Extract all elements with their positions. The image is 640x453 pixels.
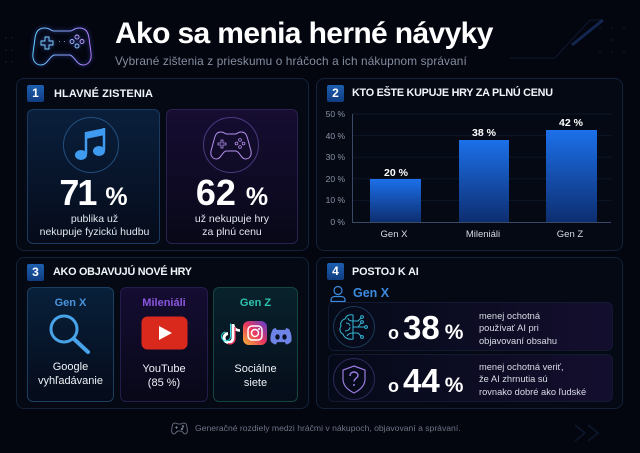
card: Gen Z: [213, 287, 298, 402]
description: menej ochotná veriť,: [479, 362, 564, 372]
bar chart: 20 %: [326, 174, 345, 184]
panel: postoj k AI: [316, 257, 623, 409]
section number 3: 3: [32, 265, 39, 279]
icon: shield question: [333, 358, 375, 400]
icon: Discord: [270, 328, 292, 344]
label Google: Google: [53, 361, 88, 373]
label YouTube: YouTube: [142, 363, 186, 375]
bar chart: 0 %: [330, 217, 345, 227]
bar chart: 38 %: [472, 127, 497, 139]
icon: music note: [63, 117, 119, 173]
caption: [40, 213, 149, 238]
label Gen X: Gen X: [353, 286, 389, 300]
bar chart: Gen Z: [557, 229, 583, 240]
panel: kto ešte kupuje: [316, 78, 623, 251]
label Gen Z: Gen Z: [240, 297, 271, 309]
bar chart: 20 %: [384, 167, 409, 179]
caption: za plnú cenu: [202, 226, 262, 238]
label Mileniáli: Mileniáli: [142, 297, 186, 309]
description: že AI zhrnutia sú: [479, 374, 548, 384]
icon: controller: [203, 117, 259, 173]
bar chart: 50 %: [326, 109, 345, 119]
stat o 38 %: o38%: [388, 309, 463, 346]
icon: footer controller: [171, 422, 188, 434]
description: [479, 362, 586, 397]
icon: AI brain: [333, 306, 375, 348]
icon: person: [330, 286, 346, 302]
description: rovnako dobré ako ľudské: [479, 387, 586, 397]
card: plná cena: [166, 109, 298, 244]
icon: TikTok: [221, 324, 240, 345]
label Google: [38, 361, 103, 387]
section number 1: 1: [32, 86, 39, 100]
section number 4: 4: [332, 264, 339, 278]
caption: už nekupuje hry: [195, 213, 269, 225]
label Google: vyhľadávanie: [38, 375, 103, 387]
icon: magnifier: [50, 314, 90, 354]
description: [479, 311, 557, 346]
bar chart: 30 %: [326, 152, 345, 162]
caption: [195, 213, 269, 238]
heading: kto ešte kupuje: KTO EŠTE KUPUJE HRY ZA PLNÚ CENU: [352, 87, 553, 99]
description: objavovaní obsahu: [479, 336, 557, 346]
icon: YouTube: [142, 316, 188, 350]
section number 4: [327, 263, 344, 280]
section number 3: [27, 264, 44, 281]
heading: ako objavujú: AKO OBJAVUJÚ NOVÉ HRY: [53, 266, 192, 278]
label Gen X: Gen X: [55, 297, 86, 309]
icon: Instagram: [243, 321, 267, 345]
section number 2: 2: [332, 86, 339, 100]
bar chart: Gen X: [381, 229, 408, 240]
heading: hlavné zistenia: HLAVNÉ ZISTENIA: [54, 88, 153, 100]
label YouTube: [142, 363, 186, 389]
card: fyzická hudba: [27, 109, 160, 244]
footer text: Generačné rozdiely medzi hráčmi v nákupoch, objavovaní a správaní.: [195, 423, 461, 433]
description: používať AI pri: [479, 323, 539, 333]
icon: neon game controller: [30, 24, 94, 68]
stat o 44 %: o44%: [388, 362, 463, 399]
panel: ako objavujú: [16, 257, 309, 409]
subtitle: Vybrané zištenia z prieskumu o hráčoch a ich nákupnom správaní: [115, 54, 467, 68]
caption: nekupuje fyzickú hudbu: [40, 226, 149, 238]
bar chart: 10 %: [326, 195, 345, 205]
section number 1: [27, 85, 44, 102]
footer: [171, 422, 461, 434]
label Sociálne siete: Sociálne: [234, 363, 277, 375]
label Sociálne siete: siete: [244, 377, 267, 389]
card: Gen X: [27, 287, 114, 402]
bar chart: [326, 109, 611, 240]
title: Ako sa menia herné návyky: [115, 17, 493, 50]
row: 38 %: [328, 302, 613, 351]
stat 62 %: 62 %: [196, 172, 268, 213]
panel: hlavné zistenia: [16, 78, 309, 251]
label Sociálne siete: [234, 363, 277, 389]
label YouTube: (85 %): [148, 377, 180, 389]
bar chart: Mileniáli: [466, 229, 500, 240]
card: Mileniáli: [120, 287, 208, 402]
bar chart: 42 %: [559, 117, 584, 129]
bar chart: 40 %: [326, 131, 345, 141]
row: 44 %: [328, 354, 613, 402]
stat 71 %: 71 %: [59, 172, 128, 213]
caption: publika už: [71, 213, 118, 225]
section number 2: [327, 85, 344, 102]
description: menej ochotná: [479, 311, 540, 321]
heading: postoj k AI: POSTOJ K AI: [352, 266, 419, 278]
